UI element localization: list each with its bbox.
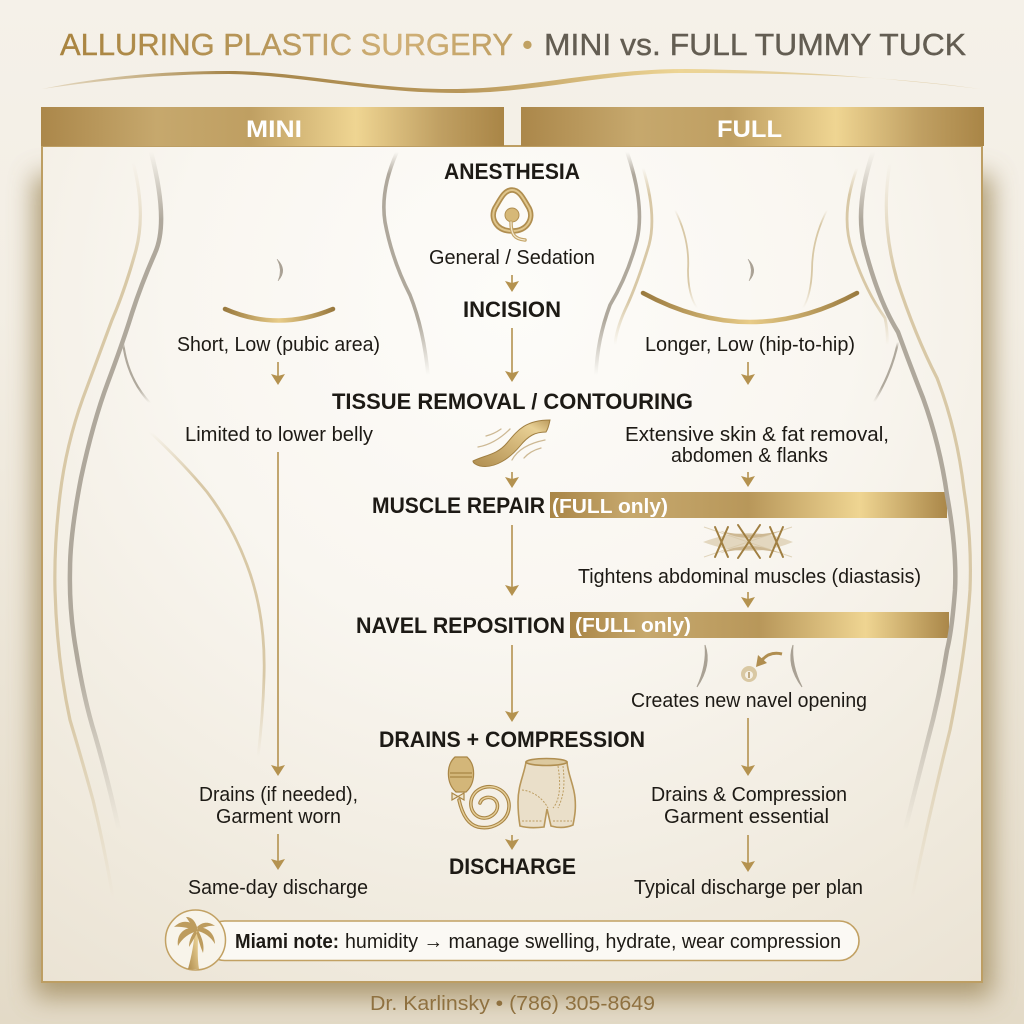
- arrow: center drains: [505, 835, 519, 850]
- heading: navel reposition: NAVEL REPOSITION: [356, 613, 565, 638]
- icon: full incision: [643, 293, 857, 322]
- text: mini tissue: Limited to lower belly: [185, 424, 373, 446]
- title: MINI vs. FULL TUMMY TUCK: [544, 27, 966, 62]
- arrow: full drains: [741, 835, 755, 872]
- band: navel reposition full only: (FULL only): [575, 615, 691, 637]
- heading: anesthesia: ANESTHESIA: [444, 159, 580, 184]
- text: mini drains: [199, 784, 358, 828]
- arrow: mini incision: [271, 362, 285, 385]
- header: FULL: FULL: [717, 116, 782, 143]
- heading: incision: INCISION: [463, 297, 561, 322]
- title: •: [522, 27, 533, 62]
- heading: tissue removal: TISSUE REMOVAL / CONTOURING: [332, 389, 693, 414]
- icon: mini navel: [277, 259, 283, 281]
- icon: muscle sutures: [703, 525, 793, 558]
- arrow: mini long: [271, 452, 285, 776]
- title: ALLURING PLASTIC SURGERY: [60, 27, 513, 62]
- main panel: [42, 146, 982, 982]
- text: mini drains: Garment worn: [216, 806, 341, 828]
- text: navel description: Creates new navel opening: [631, 690, 867, 712]
- heading: muscle repair: MUSCLE REPAIR: [372, 493, 545, 518]
- arrow: tissue center: [505, 472, 519, 488]
- arrow: center muscle: [505, 525, 519, 596]
- text: full drains: [651, 784, 847, 828]
- text: mini incision: Short, Low (pubic area): [177, 334, 380, 356]
- callout: miami note: [166, 910, 859, 970]
- icon: tissue contour: [473, 420, 550, 466]
- text: mini drains: Drains (if needed),: [199, 784, 358, 806]
- text: full incision: Longer, Low (hip-to-hip): [645, 334, 855, 356]
- text: full drains: Drains & Compression: [651, 784, 847, 806]
- panel shadow: [34, 175, 992, 997]
- band: muscle repair full only: (FULL only): [552, 496, 668, 518]
- body outline: mini: [55, 152, 428, 898]
- arrow: full muscle: [741, 592, 755, 608]
- text: mini discharge: Same-day discharge: [188, 877, 368, 899]
- arrow: mini drains: [271, 834, 285, 870]
- icon: mini incision: [225, 309, 333, 320]
- header: FULL: [521, 107, 984, 146]
- heading: drains compression: DRAINS + COMPRESSION: [379, 727, 645, 752]
- heading: discharge: DISCHARGE: [449, 854, 576, 879]
- title swoosh: [42, 69, 980, 93]
- text: muscle description: Tightens abdominal muscles (diastasis): [578, 566, 921, 588]
- header: MINI: [41, 107, 504, 146]
- arrow: anesthesia to incision: [505, 275, 519, 292]
- icon: compression garment: [518, 758, 575, 828]
- band: muscle repair full only: [550, 492, 947, 518]
- band: navel reposition full only: [570, 612, 949, 638]
- header: MINI: MINI: [246, 116, 302, 143]
- text: full tissue: abdomen & flanks: [671, 445, 828, 467]
- text: full tissue: [625, 424, 889, 467]
- arrow: center navel: [505, 645, 519, 722]
- text: full tissue: Extensive skin & fat removal,: [625, 424, 889, 446]
- arrow: full navel: [741, 718, 755, 776]
- arrow: full tissue: [741, 472, 755, 487]
- arrow: full incision: [741, 362, 755, 385]
- arrow: incision center: [505, 328, 519, 382]
- icon: drain bulb: [448, 757, 509, 828]
- body outline: full: [596, 152, 970, 898]
- icon: full navel: [748, 259, 754, 281]
- text: full drains: Garment essential: [664, 806, 829, 828]
- icon: palm tree: [166, 910, 226, 970]
- callout: miami note: Miami note:: [235, 931, 339, 953]
- icon: anesthesia mask: [493, 190, 531, 240]
- callout: miami note: humidity → manage swelling, hydrate, wear compression: [345, 931, 841, 953]
- footer contact: Dr. Karlinsky • (786) 305-8649: [370, 993, 655, 1015]
- text: full discharge: Typical discharge per plan: [634, 877, 863, 899]
- text: general sedation: General / Sedation: [429, 247, 595, 269]
- icon: navel reposition: [697, 645, 802, 687]
- title: [60, 27, 966, 62]
